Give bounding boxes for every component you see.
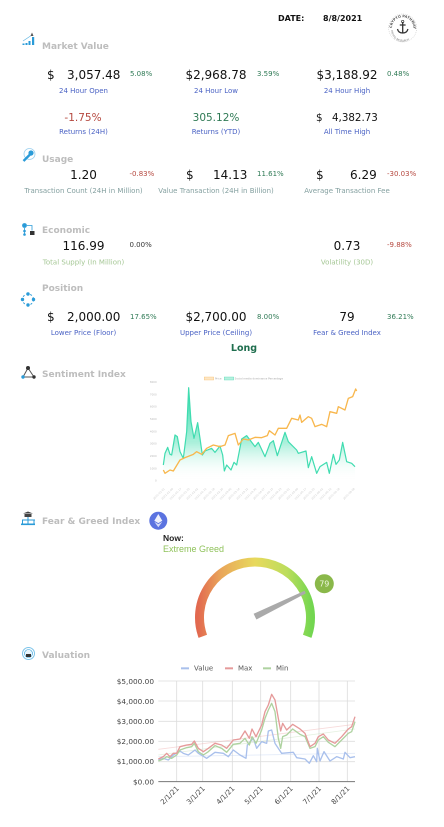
icon: hierarchy (21, 512, 35, 525)
icon: ethereum badge (149, 512, 167, 530)
heading: economic: Economic (42, 226, 90, 236)
upper price (180, 310, 280, 337)
x axis labels: 2021-05-25 (302, 487, 316, 501)
24 hour high: 24 Hour High (324, 87, 370, 95)
volatility: Volatility (30D) (321, 258, 373, 266)
x axis labels (159, 785, 351, 806)
upper price: $2,700.00 (185, 310, 247, 324)
24 hour low (185, 68, 280, 95)
24 hour low: 24 Hour Low (194, 87, 238, 95)
24 hour open: 3,057.48 (67, 68, 120, 82)
panel: sentiment index (21, 366, 357, 501)
all time high: $ (316, 112, 323, 124)
value transaction: $ (186, 168, 194, 182)
date: 8/8/2021 (323, 14, 363, 23)
trend lines (158, 724, 355, 757)
logo: anchor seal: CRYPTO PATHWAY (390, 14, 416, 29)
x axis labels: 2021-03-06 (219, 487, 233, 501)
x axis labels: 4/1/21 (215, 785, 236, 806)
x axis labels: 6/1/21 (273, 785, 295, 806)
y axis labels: 8000 (150, 380, 157, 384)
heading: position: Position (42, 284, 83, 294)
y axis labels: $2,000.00 (117, 737, 154, 746)
max line (158, 694, 355, 759)
y axis labels: $5,000.00 (117, 677, 154, 686)
y axis labels (117, 677, 154, 786)
now label: Extreme Greed (163, 544, 224, 554)
total supply: Total Supply (In Million) (42, 258, 124, 266)
x axis labels: 2021-01-09 (160, 487, 174, 501)
x axis labels: 2021-01-25 (177, 487, 191, 501)
all time high (316, 112, 378, 136)
24 hour open (47, 68, 153, 95)
legend: Max (238, 665, 252, 673)
x axis labels: 8/1/21 (330, 785, 351, 806)
gauge needle (254, 591, 306, 620)
x axis labels: 2021-03-14 (227, 487, 241, 501)
x axis labels: 7/1/21 (302, 785, 323, 806)
legend (181, 665, 288, 673)
x axis labels: 2021-05-09 (285, 487, 299, 501)
icon: diamond nodes (21, 292, 35, 307)
min line (158, 703, 355, 761)
x axis labels: 2021-04-07 (252, 487, 266, 501)
y axis labels: 5000 (150, 417, 157, 421)
now label (163, 533, 224, 554)
y axis labels: 1000 (150, 466, 157, 470)
x axis labels: 2021-03-30 (244, 487, 258, 501)
lower price: $ (47, 310, 55, 324)
lower price: 2,000.00 (67, 310, 120, 324)
gauge value badge: 79 (319, 580, 329, 588)
heading: sentiment index: Sentiment Index (42, 370, 126, 380)
legend: Price (215, 377, 222, 381)
volatility: -9.88% (387, 241, 412, 249)
x axis labels: 2021-06-02 (310, 487, 324, 501)
fear and greed value: 79 (339, 310, 355, 324)
x axis labels: 2021-02-18 (202, 487, 216, 501)
x axis labels: 2021-06-18 (327, 487, 341, 501)
y axis labels (150, 380, 157, 482)
x axis labels: 2021-02-10 (194, 487, 208, 501)
fear and greed value (313, 310, 414, 337)
volatility (321, 239, 412, 266)
returns 24h: Returns (24H) (59, 128, 108, 136)
y axis labels: $3,000.00 (117, 717, 154, 726)
x axis labels: 2021-08-08 (342, 487, 356, 501)
average transaction fee: 6.29 (350, 168, 377, 182)
line chart: price and sentiment (150, 377, 357, 501)
x axis labels: 2021-04-23 (269, 487, 283, 501)
returns ytd: Returns (YTD) (192, 128, 241, 136)
average transaction fee (304, 168, 417, 195)
lower price: 17.65% (130, 313, 157, 321)
returns 24h: -1.75% (64, 112, 102, 124)
icon: wrench (24, 148, 35, 161)
panel: usage (23, 148, 417, 195)
average transaction fee: Average Transaction Fee (304, 187, 390, 195)
x axis labels: 2021-04-15 (260, 487, 274, 501)
y axis labels: 7000 (150, 392, 157, 396)
24 hour open: $ (47, 68, 55, 82)
value transaction (158, 168, 284, 195)
24 hour low: 3.59% (257, 70, 280, 78)
24 hour high: $3,188.92 (316, 68, 378, 82)
x axis labels: 2021-01-01 (152, 487, 166, 501)
24 hour high (316, 68, 410, 95)
all time high: All Time High (324, 128, 370, 136)
24 hour open: 24 Hour Open (59, 87, 108, 95)
legend (204, 377, 283, 381)
volatility: 0.73 (334, 239, 360, 253)
transaction count (23, 168, 155, 195)
line chart: value max min (117, 665, 355, 806)
upper price: Upper Price (Ceiling) (180, 329, 252, 337)
x axis labels: 2021-03-22 (235, 487, 249, 501)
grid (158, 681, 355, 782)
logo: anchor seal: CRYPTO RESEARCH (391, 30, 409, 42)
lower price: Lower Price (Floor) (51, 329, 116, 337)
y axis labels: 2000 (150, 454, 157, 458)
returns ytd: 305.12% (193, 112, 239, 124)
y axis labels: $0.00 (133, 777, 154, 786)
total supply: 0.00% (130, 241, 152, 249)
price line (163, 389, 357, 473)
upper price: 8.00% (257, 313, 280, 321)
panel: fear and greed index (21, 512, 334, 636)
transaction count: -0.83% (130, 170, 155, 178)
heading: market value: Market Value (42, 42, 109, 52)
panel: valuation (22, 648, 355, 806)
lower price (47, 310, 157, 337)
now label: Now: (163, 533, 184, 543)
value transaction: Value Transaction (24H in Billion) (158, 187, 274, 195)
icon: nodes (22, 223, 34, 236)
legend: Min (276, 665, 288, 673)
panel: economic (22, 223, 412, 266)
x axis labels: 2021-02-02 (185, 487, 199, 501)
legend: Value (194, 665, 213, 673)
y axis labels: 6000 (150, 405, 157, 409)
sentiment line (163, 388, 355, 473)
total supply: 116.99 (62, 239, 104, 253)
x axis labels: 2/1/21 (159, 785, 181, 806)
transaction count: Transaction Count (24H in Million) (23, 187, 143, 195)
x axis (158, 780, 355, 783)
average transaction fee: -30.03% (387, 170, 417, 178)
total supply (42, 239, 152, 266)
icon: coin (22, 648, 34, 660)
y axis labels: $4,000.00 (117, 697, 154, 706)
fear and greed value: 36.21% (387, 313, 414, 321)
icon: growth bars (22, 32, 34, 45)
heading: usage: Usage (42, 155, 73, 165)
y axis labels: 3000 (150, 442, 157, 446)
all time high: 4,382.73 (332, 112, 378, 124)
fear and greed value: Fear & Greed Index (313, 329, 381, 337)
heading: valuation: Valuation (42, 651, 90, 661)
position signal: Long (231, 343, 257, 354)
x axis labels: 3/1/21 (185, 785, 207, 806)
x axis labels (152, 487, 356, 501)
x axis labels: 2021-06-10 (319, 487, 333, 501)
value line (158, 730, 355, 763)
sentiment area (163, 388, 355, 480)
value transaction: 14.13 (213, 168, 247, 182)
date: DATE: (278, 14, 304, 23)
x axis labels: 2021-05-17 (294, 487, 308, 501)
heading: fear and greed: Fear & Greed Index (42, 517, 140, 527)
average transaction fee: $ (316, 168, 324, 182)
24 hour high: 0.48% (387, 70, 410, 78)
panel: market value (22, 32, 410, 136)
gauge arc (200, 562, 311, 636)
x axis labels: 2021-05-01 (277, 487, 291, 501)
panel: position (21, 284, 414, 354)
logo: anchor seal (388, 14, 417, 42)
icon: network (21, 366, 36, 379)
returns 24h (59, 112, 108, 136)
value transaction: 11.61% (257, 170, 284, 178)
gauge (200, 562, 334, 636)
y axis labels: 0 (155, 478, 157, 482)
x axis labels: 5/1/21 (243, 785, 265, 806)
returns ytd (192, 112, 241, 136)
date (278, 14, 363, 23)
x axis labels: 2021-01-17 (169, 487, 183, 501)
legend: Social media dominance Percentage (235, 377, 283, 381)
x axis labels: 2021-02-26 (210, 487, 224, 501)
24 hour low: $2,968.78 (185, 68, 247, 82)
y axis labels: $1,000.00 (117, 757, 154, 766)
y axis labels: 4000 (150, 429, 157, 433)
transaction count: 1.20 (70, 168, 97, 182)
24 hour open: 5.08% (130, 70, 153, 78)
